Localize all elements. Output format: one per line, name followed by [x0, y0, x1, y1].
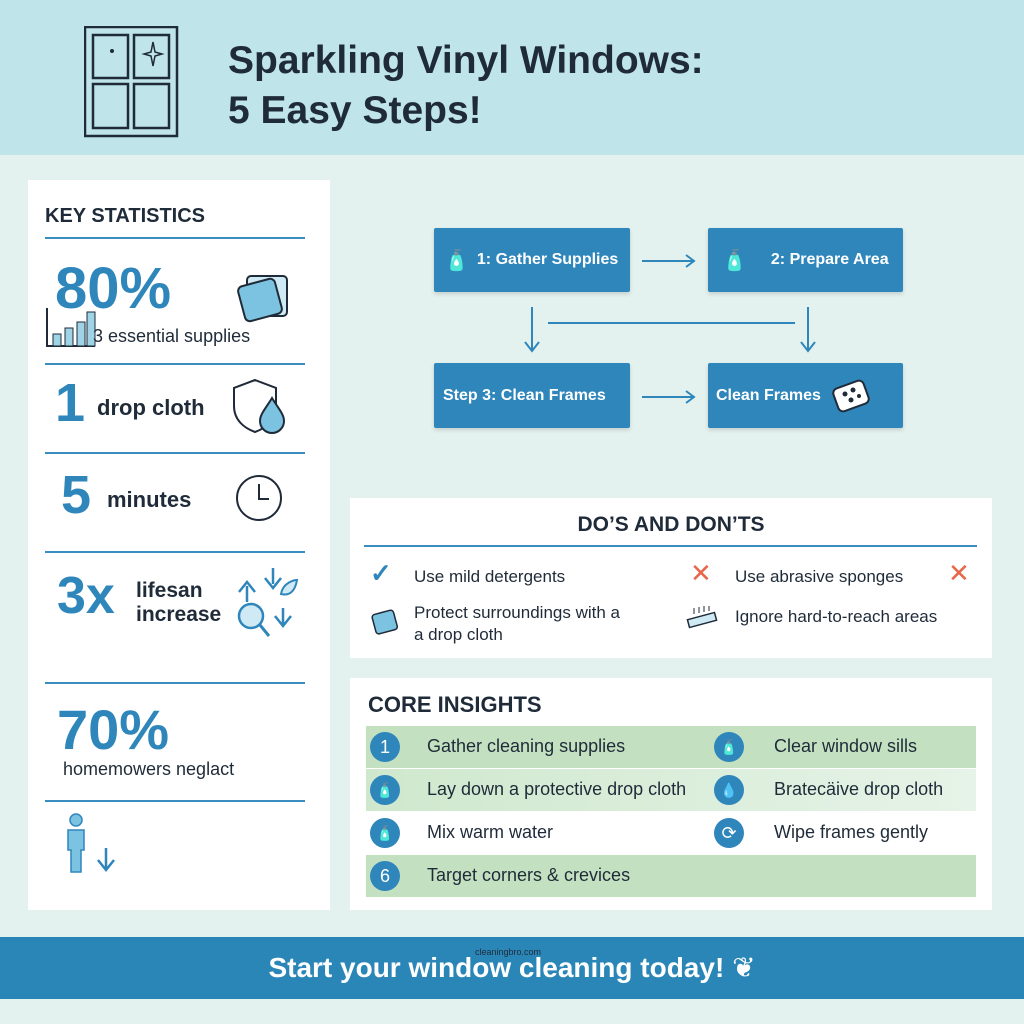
row 4	[366, 855, 976, 897]
row 3: Wipe frames gently	[774, 822, 928, 842]
do: protect: a drop cloth	[414, 625, 503, 644]
do: protect: Protect surroundings with a	[414, 603, 620, 622]
row 3: Mix warm water	[427, 822, 553, 842]
row 1	[366, 726, 976, 768]
arrows	[524, 254, 816, 404]
stat: 80%: 3 essential supplies	[93, 326, 250, 346]
footer text: Start your window cleaning today! ❦	[268, 952, 756, 983]
stat: 70%	[57, 698, 234, 779]
title: Sparkling Vinyl Windows:	[228, 39, 704, 82]
row 2	[366, 769, 976, 811]
heading: key statistics: KEY STATISTICS	[45, 205, 205, 227]
stat: 70%: 70%	[57, 698, 169, 761]
row 1: 1	[380, 737, 390, 757]
step 4	[708, 363, 903, 428]
do: mild detergents: ✓	[370, 558, 392, 588]
heading: CORE INSIGHTS	[368, 692, 542, 717]
don't: abrasive	[690, 558, 970, 588]
row 2: Lay down a protective drop cloth	[427, 779, 686, 799]
icon: person down	[67, 813, 115, 873]
footer	[0, 937, 1024, 999]
title: 5 Easy Steps!	[228, 89, 482, 132]
step 4: Clean Frames	[716, 386, 821, 404]
step 2: 2: Prepare Area	[771, 251, 889, 268]
do: mild detergents: Use mild detergents	[414, 567, 565, 586]
stat: 1 drop cloth: 1	[55, 373, 85, 433]
do: mild detergents	[370, 558, 565, 588]
stat: 3x lifespan: lifesan	[136, 579, 203, 602]
row 1: 🧴	[720, 739, 738, 755]
icon: window	[84, 26, 178, 138]
don't: abrasive: ✕	[948, 558, 970, 588]
row 3	[366, 812, 976, 854]
stat: 5 minutes: minutes	[107, 487, 191, 512]
step 1: 1: Gather Supplies	[477, 251, 618, 268]
flowchart	[432, 228, 904, 432]
stat: 3x lifespan: 3x	[57, 567, 115, 625]
stat: 5 minutes: 5	[61, 465, 91, 525]
row 3: ⟳	[721, 823, 737, 843]
header	[0, 0, 1024, 155]
stat: 1 drop cloth	[55, 373, 285, 434]
step 1	[434, 228, 630, 292]
title	[228, 39, 704, 132]
don't: hard-to-reach	[686, 606, 937, 628]
don't: abrasive: Use abrasive sponges	[735, 567, 903, 586]
stat: 5 minutes	[61, 465, 282, 525]
step 1: 🧴	[444, 250, 469, 272]
stat: 3x lifespan: increase	[136, 603, 221, 626]
heading: DO’S AND DON’TS	[577, 513, 765, 536]
stat: 1 drop cloth: drop cloth	[97, 395, 205, 420]
do: protect	[371, 603, 620, 644]
panel: do's and don'ts	[350, 498, 992, 658]
stat: 3x lifespan	[57, 567, 298, 637]
row 4: 6	[380, 866, 390, 886]
stat: 80%	[46, 256, 288, 347]
panel: key statistics	[28, 180, 330, 910]
footer: cleaningbro.com	[475, 947, 541, 957]
don't: hard-to-reach: Ignore hard-to-reach areas	[735, 607, 937, 626]
step 2	[708, 228, 903, 292]
don't: abrasive: ✕	[690, 558, 712, 588]
row 2: 💧	[720, 782, 738, 798]
row 4: Target corners & crevices	[427, 865, 630, 885]
panel: core insights	[350, 678, 992, 910]
stat: 70%: homemowers neglact	[63, 759, 234, 779]
step 2: 🧴	[722, 250, 747, 272]
row 1: Clear window sills	[774, 736, 917, 756]
row 2: Bratecäive drop cloth	[774, 779, 943, 799]
row 3: 🧴	[376, 825, 394, 841]
step 3	[434, 363, 630, 428]
row 2: 🧴	[376, 782, 394, 798]
step 3: Step 3: Clean Frames	[443, 386, 606, 404]
row 1: Gather cleaning supplies	[427, 736, 625, 756]
stat: 80%: 80%	[55, 256, 171, 321]
